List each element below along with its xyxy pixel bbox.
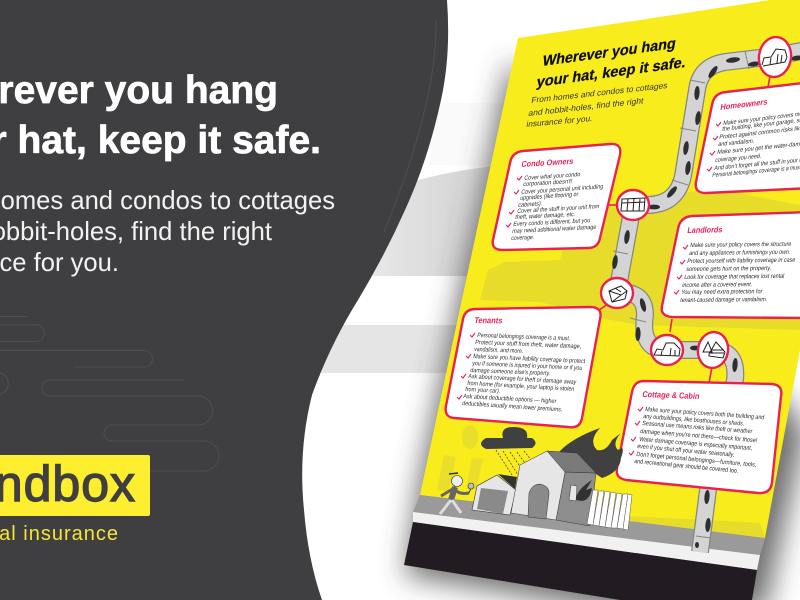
rain — [496, 450, 535, 478]
panel: condo owners: Every condo is different, but you — [513, 217, 591, 228]
poster subtitle: insurance for you. — [526, 113, 593, 129]
panel: landlords: income after a covered event. — [682, 281, 753, 289]
infographic poster — [404, 0, 800, 600]
garage — [472, 475, 516, 515]
panel: landlords: someone gets hurt on the property. — [686, 265, 772, 273]
heading — [0, 69, 321, 162]
darker hills in poster background — [480, 190, 800, 330]
panel: cottage and cabin: Water damage coverage is especially important, — [639, 436, 753, 452]
subheading — [0, 187, 335, 277]
panel: cottage and cabin: Make sure your policy covers both the building and — [645, 406, 765, 421]
dark left panel — [0, 0, 448, 600]
panel: tenants: vandalism, and more. — [474, 346, 524, 355]
road dividers — [613, 51, 749, 538]
panel: tenants: Personal belongings coverage is a must. — [477, 332, 571, 342]
panel: tenants: Tenants — [474, 315, 504, 325]
house roof — [547, 451, 596, 473]
panel: landlords: Landlords — [687, 224, 724, 235]
panel: tenants: damage someone else's property. — [470, 367, 551, 377]
icon: cabin with trees — [695, 330, 731, 370]
person walking with magnifying glass — [440, 473, 474, 514]
footprints along the road — [611, 55, 800, 548]
panel: landlords: You may need extra protection for — [681, 288, 763, 296]
panel: condo owners: upgrades (like flooring or — [520, 191, 579, 202]
panel: tenants: Ask about deductible options — higher — [463, 393, 557, 405]
house front — [511, 451, 565, 520]
black footer band — [404, 522, 757, 600]
panel: tenants: from home (for example, your laptop is stolen — [467, 380, 575, 393]
panel: landlords — [662, 212, 800, 318]
icon: house — [756, 35, 794, 79]
panel: cottage and cabin: even if you shut off your water seasonally. — [637, 443, 735, 459]
panel: landlords: tenant-caused damage or vandalism. — [680, 296, 768, 304]
panel: cottage and cabin: and recreational gear should be covered too. — [634, 458, 739, 475]
icon: rental houses — [651, 335, 683, 365]
poster subtitle: and hobbit-holes, find the right — [528, 95, 645, 118]
front door — [528, 484, 549, 519]
panel: tenants: deductibles usually mean lower premiums. — [462, 400, 563, 413]
connector lines from cards to icons — [598, 76, 770, 383]
panel: landlords: Look for coverage that replaces lost rental — [684, 273, 785, 281]
panel: condo owners: Cover what your condo — [524, 171, 581, 182]
panel: tenants — [446, 307, 601, 427]
panel: tenants: Protect your stuff from theft, water damage, — [475, 339, 582, 350]
window flame — [576, 480, 592, 501]
panel: tenants: Ask about coverage for theft or damage away — [468, 373, 578, 386]
sidewalk — [413, 512, 760, 570]
winding road path — [613, 50, 800, 552]
poster title: Wherever you hang — [541, 35, 677, 70]
paper drop shadow — [405, 60, 800, 600]
panel: condo owners — [493, 144, 620, 250]
storm cloud — [481, 427, 536, 449]
icon: condo building — [617, 190, 649, 220]
window with flame — [569, 485, 577, 501]
panel: homeowners: Homeowners — [720, 96, 769, 112]
garage door — [477, 488, 508, 514]
panel: cottage and cabin: Cottage & Cabin — [642, 389, 700, 401]
panel: condo owners: Cover all the stuff in your unit from — [517, 203, 600, 215]
panel: tenants: from your car). — [465, 386, 501, 395]
poster yellow background — [420, 0, 800, 538]
panel: condo owners: may need additional water damage — [512, 224, 597, 235]
panel: condo owners: coverage. — [511, 234, 535, 242]
icon: box — [601, 278, 633, 308]
panel: homeowners — [696, 82, 800, 193]
panel: condo owners: corporation doesn't! — [523, 178, 573, 188]
panel: cottage and cabin — [617, 381, 781, 493]
panel: cottage and cabin: Seasonal use means risks like theft or weather — [642, 420, 753, 435]
panel: condo owners: Cover your personal unit including — [521, 183, 604, 196]
panel: cottage and cabin: damage when you're not there—check for those! — [640, 428, 758, 444]
garage roof — [498, 474, 517, 489]
panel: cottage and cabin: any outbuildings, like boathouses or sheds. — [643, 413, 745, 428]
poster subtitle — [526, 80, 668, 129]
panel: tenants: you if someone is injured in your home or if you — [472, 360, 583, 372]
poster subtitle: From homes and condos to cottages — [531, 80, 668, 105]
road surface — [413, 495, 765, 555]
illustration: burning house scene — [440, 427, 632, 530]
background: blurred room scene — [300, 0, 800, 600]
faint background trees — [437, 425, 483, 492]
panel: homeowners: and vandalism. — [718, 138, 755, 148]
panel: condo owners: Condo Owners — [521, 156, 575, 169]
panel: homeowners: coverage you need. — [715, 153, 762, 164]
right edge fold band — [628, 516, 765, 538]
poster title — [535, 35, 687, 91]
panel: condo owners: theft, water damage, etc. — [515, 211, 576, 221]
poster title: your hat, keep it safe. — [535, 54, 687, 91]
decorative cloud line pattern — [0, 20, 436, 471]
house side wall — [556, 472, 596, 526]
large flames — [559, 428, 623, 478]
panel: tenants: Make sure you have liability coverage to protect — [473, 353, 586, 365]
panel: condo owners: cabinets). — [518, 200, 543, 209]
panel: cottage and cabin: Don't forget personal belongings—furniture, tools, — [636, 451, 757, 469]
white picket fence — [587, 490, 632, 530]
